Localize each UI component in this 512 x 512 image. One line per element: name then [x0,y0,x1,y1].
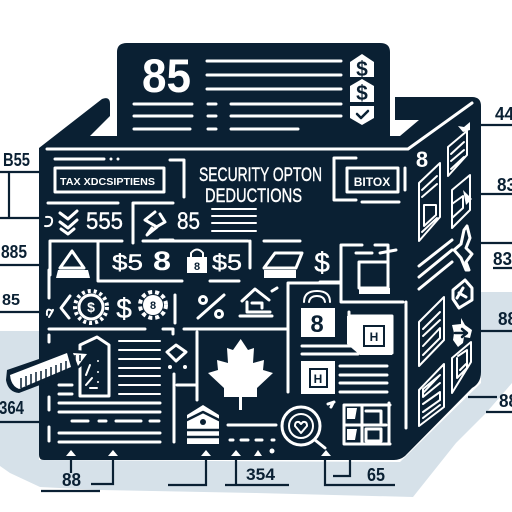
bottom labels [62,465,385,490]
bottom labels: 88 [62,470,81,490]
small box: H [314,372,322,386]
bottom arrows [66,448,331,456]
row one [45,203,256,243]
left labels [0,150,30,418]
tab tag icons [350,54,374,125]
lock panel: 8 [310,311,324,338]
row one: 555 [86,208,123,235]
calendar grid [344,403,390,444]
tab number: 85 [142,49,191,102]
puzzle icon [452,318,472,347]
shield stack icon [187,405,219,444]
pencil [6,348,96,393]
small box [301,361,387,394]
monitor icon [356,250,396,294]
panel four [419,297,444,366]
icon [454,226,472,270]
left labels: 885 [1,242,27,262]
tab tag icons: $ [356,58,368,81]
right vertical rules [288,283,406,428]
row three: $ [116,293,132,324]
BITOX box: BITOX [354,175,390,189]
row one: 85 [177,208,200,235]
security heading: DEDUCTIONS [205,186,302,207]
BITOX box [334,158,405,202]
bottom labels: 354 [246,465,276,484]
small panel [347,312,392,355]
percent [198,295,224,318]
lock panel [301,291,358,354]
gear icon: $ [87,299,95,315]
bottom callout lines [41,460,395,491]
small panel: H [370,330,378,344]
panel three [452,175,470,228]
form document [59,337,160,442]
security heading: SECURITY OPTON [199,165,322,186]
top tab [134,49,374,129]
right labels [493,104,512,411]
box body [6,43,481,460]
small diamond icon [167,345,187,369]
bottom labels: 65 [367,465,385,485]
row two: $5 [112,250,143,275]
side label 8: 8 [416,147,428,172]
security heading [199,165,322,207]
row two: $5 [212,250,242,275]
right face panels [416,122,472,426]
left labels: B55 [3,150,30,170]
tab tag icons: $ [356,82,368,105]
gear icon two: 8 [150,300,156,312]
panel two [419,163,440,241]
row two: 8 [153,246,171,276]
tax exemptions label: TAX XDCSIPTIENS [60,177,155,188]
gear icon [75,291,107,323]
row three [47,288,287,334]
panel five [419,364,444,426]
row two: $ [314,247,330,278]
house icon [240,288,277,316]
lock icon: 8 [194,261,200,273]
row two [50,240,403,302]
gear icon two [140,292,166,318]
panel one [448,131,467,176]
maple leaf [208,339,273,410]
hex icon [453,280,472,308]
lock icon [187,250,207,273]
left callout lines [0,172,46,422]
magnifier [282,402,334,448]
dashes near magnifier [228,425,276,440]
right callout lines [468,125,512,412]
panel six [452,342,471,393]
tax exemptions label [55,159,164,192]
left labels: 85 [2,292,20,309]
ground shadow [0,292,512,497]
stripes [419,240,452,289]
